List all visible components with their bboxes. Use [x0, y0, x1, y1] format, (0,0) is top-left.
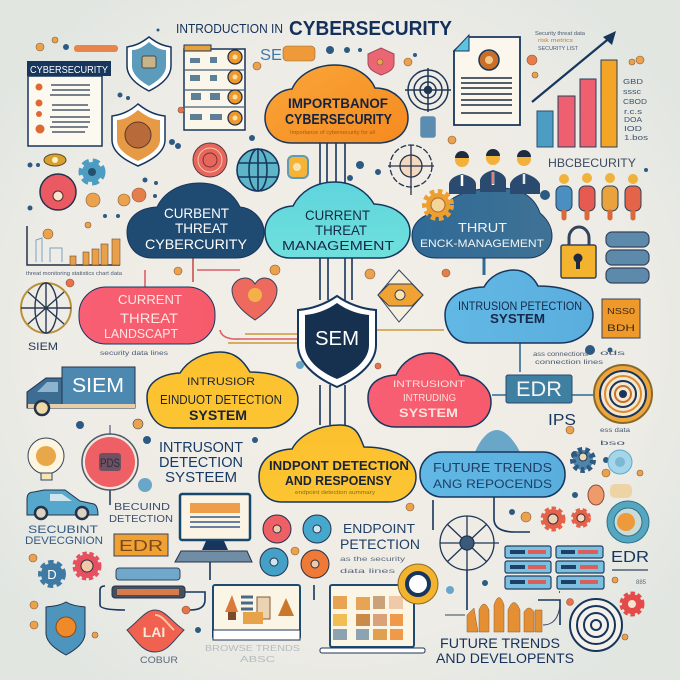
title — [176, 18, 453, 40]
heading: intrusion detection system — [159, 439, 243, 486]
label: becuind detection — [109, 502, 173, 525]
icon: concentric rings orange — [594, 365, 652, 423]
icon: circuit box: BDH — [607, 323, 635, 333]
icon: orange key tile — [288, 156, 308, 178]
icon: red gear — [622, 594, 642, 614]
title: CYBERSECURITY — [289, 18, 453, 40]
icon: SIEM truck — [27, 367, 135, 415]
bar chart: left panel: threat monitoring statistics chart data — [26, 271, 122, 277]
label: future trends and developments: AND DEVELOPENTS — [436, 650, 574, 666]
label: future trends and developments: FUTURE TRENDS — [440, 635, 560, 651]
cloud: importance of cybersecurity: Importance of cybersecurity for all — [290, 130, 375, 136]
decorative underline with notes — [612, 570, 648, 586]
icon: LAI badge — [127, 610, 184, 652]
icon: blue gear — [82, 162, 102, 182]
small text: top right notes: connection lines — [535, 360, 603, 366]
small text: top right notes — [533, 351, 631, 447]
cloud: intrusion detection system: SYSTEM — [189, 407, 247, 423]
pill: current threat landscape: LANDSCAPT — [104, 326, 178, 341]
small text column: CBOD — [623, 99, 647, 106]
label: SE tag: SE — [260, 47, 282, 64]
cloud: current threat cybercurity — [127, 183, 264, 258]
small text column: 1.bos — [624, 135, 649, 142]
icons: three team members — [449, 149, 540, 194]
heading: intrusion detection system: INTRUSONT — [159, 439, 243, 456]
label: browse trends faded — [205, 644, 300, 664]
label: endpoint detection: ENDPOINT — [343, 521, 415, 536]
connector lines — [100, 143, 594, 625]
small text: siem notes: security data lines — [100, 351, 168, 357]
label: EDR: EDR — [611, 549, 649, 566]
icon: network wheel — [440, 516, 499, 570]
icon: blue shield — [127, 37, 171, 91]
chart: orange peaks — [467, 598, 542, 632]
small text column: GBD — [623, 79, 643, 86]
tag: EDR blue — [506, 375, 572, 403]
small text: chart notes — [535, 31, 585, 52]
cloud: threat management: ENCK-MANAGEMENT — [420, 238, 544, 250]
cloud: intrusion detection system: INTRUSIOR — [187, 376, 255, 388]
icon: gold badge — [44, 154, 66, 166]
panel: cybersecurity checklist — [27, 61, 111, 146]
small text: top right notes: ods — [600, 351, 625, 357]
icon: pale blue badge — [608, 450, 632, 474]
heading: intrusion detection system: DETECTION — [159, 454, 243, 471]
label: SIEM small: SIEM — [28, 341, 58, 353]
label: secubint devecgnion: DEVECGNION — [25, 535, 103, 547]
icon: desktop computer — [175, 494, 252, 562]
central SEM shield — [298, 296, 376, 387]
crosshair target: threat — [388, 145, 434, 195]
icon: orange gear — [426, 193, 450, 217]
small text: endpoint notes — [340, 557, 405, 575]
icon: blue car — [27, 490, 98, 519]
icon: gold globe wheel — [21, 283, 71, 333]
icon: gold ring badge — [398, 564, 438, 604]
cloud: importance of cybersecurity: IMPORTBANOF — [288, 95, 388, 111]
small text: top right notes: bso — [600, 441, 627, 447]
cloud: current threat cybercurity: CURBENT — [164, 205, 229, 221]
cloud: threat management — [412, 188, 552, 258]
cloud: intrusion prevention system — [445, 270, 593, 343]
cloud: endpoint detection and response — [259, 425, 416, 502]
cloud: intrusion prevention system coral: SYSTEM — [399, 406, 458, 420]
cloud: intrusion prevention system coral — [368, 353, 491, 427]
label: becuind detection: DETECTION — [109, 514, 173, 525]
icon: database stack — [606, 232, 649, 283]
central SEM shield: SEM — [315, 328, 359, 350]
pill: current threat landscape — [79, 287, 215, 344]
icon: laptop with tools — [213, 585, 300, 640]
label: endpoint detection: PETECTION — [340, 536, 420, 552]
small text: endpoint notes: data lines — [340, 569, 395, 575]
icon: LAI badge: LAI — [143, 624, 165, 640]
chart baseline — [445, 605, 560, 625]
cloud: intrusion prevention system coral: INTRUSIONT — [393, 379, 466, 389]
cloud: current threat management: THREAT — [315, 222, 367, 238]
cloud: current threat cybercurity: THREAT — [175, 220, 228, 236]
label: endpoint detection — [340, 521, 420, 552]
small text column: sssc — [623, 89, 642, 96]
label: future trends and developments — [436, 635, 574, 666]
icon: laptop with grid — [320, 585, 425, 653]
icon: heart — [232, 278, 277, 320]
icon: red gear face — [75, 554, 99, 578]
icon: teal ring — [607, 501, 649, 543]
icon: red circle alarm — [40, 174, 76, 210]
icon: red target IPS: PDS — [100, 456, 120, 470]
icon: light bulb — [28, 438, 64, 480]
document with seal — [454, 35, 520, 125]
cloud: current threat cybercurity: CYBERCURITY — [145, 236, 248, 252]
cloud: future trends and responses: ANG REPOCENDS — [433, 477, 552, 491]
icon: coral badges — [588, 484, 632, 505]
label: cobur: COBUR — [140, 655, 179, 665]
cloud: importance of cybersecurity: CYBERSECURITY — [285, 111, 392, 128]
icons: four standing figures — [556, 173, 641, 218]
bars: blue and dark — [112, 568, 185, 598]
icon: teal globe — [237, 149, 279, 191]
icon: padlock — [561, 227, 596, 278]
cloud: intrusion prevention system coral: INTRUDING — [403, 393, 456, 404]
icon: diamond eye — [378, 270, 423, 322]
cloud: current threat management — [265, 182, 410, 258]
icon: circuit box: NSS0 — [607, 307, 636, 316]
icon: navy D gear — [41, 563, 63, 585]
label: SE tag — [260, 46, 315, 64]
cloud: threat management: THRUT — [458, 220, 507, 235]
panel: cybersecurity checklist: CYBERSECURITY — [30, 65, 108, 76]
icon: SIEM truck: SIEM — [72, 375, 124, 397]
icon: crosshair target — [405, 68, 451, 137]
label: IPS: IPS — [548, 412, 576, 429]
icon: red target IPS — [82, 425, 138, 505]
bar chart: left panel — [26, 226, 122, 277]
cloud: current threat management: MANAGEMENT — [282, 238, 394, 253]
small text: chart notes: SECURITY LIST — [538, 46, 578, 52]
icon: blue face shield — [46, 602, 85, 655]
cloud: importance of cybersecurity — [265, 65, 408, 143]
small text: chart notes: risk metrics — [538, 38, 574, 44]
small text: top right notes: ess data — [600, 428, 631, 434]
small text: chart notes: Security threat data — [535, 31, 585, 37]
icon: steel gear — [573, 450, 593, 470]
label: becuind detection: BECUIND — [114, 502, 170, 513]
small text column: DOA — [624, 117, 642, 124]
small text: top right notes: ass connections — [533, 352, 588, 358]
pill: current threat landscape: THREAT — [120, 310, 178, 326]
heading: intrusion detection system: SYSTEEM — [165, 469, 237, 486]
cloud: intrusion prevention system: INTRUSION PETECTION — [458, 299, 582, 313]
cloud: future trends and responses — [420, 430, 565, 497]
title: INTRODUCTION IN — [176, 21, 283, 36]
label: security: HBCBECURITY — [548, 156, 636, 170]
icon: circuit box — [602, 299, 640, 338]
icon: navy D gear: D — [47, 567, 57, 582]
cloud: endpoint detection and response: INDPONT DETECTION — [269, 458, 409, 473]
chips: six status tags — [505, 546, 604, 589]
label: browse trends faded: BROWSE TRENDS — [205, 644, 300, 653]
icon: shield tag — [368, 48, 394, 75]
decorative underline with notes: 885 — [636, 580, 647, 586]
tag: EDR blue: EDR — [516, 378, 562, 401]
cloud: endpoint detection and response: AND RESPOENSY — [285, 473, 392, 488]
icon: orange shield — [112, 104, 165, 166]
pill: current threat landscape: CURRENT — [118, 292, 182, 307]
cloud: intrusion prevention system: SYSTEM — [490, 311, 545, 326]
panel: status list — [184, 45, 245, 130]
icons: four status circles — [260, 515, 331, 578]
cloud: endpoint detection and response: endpoint detection summary — [295, 490, 376, 496]
small text column: IOD — [624, 126, 642, 133]
icons: twin red gears — [543, 509, 589, 529]
small text column: r.c.s — [624, 109, 643, 116]
cloud: intrusion detection system — [147, 352, 298, 428]
cloud: intrusion detection system: EINDUOT DETECTION — [160, 392, 282, 407]
icon: coral spiral — [193, 143, 227, 177]
tag: EDR orange: EDR — [119, 538, 163, 555]
small text: endpoint notes: as the security — [340, 557, 405, 563]
label: secubint devecgnion: SECUBINT — [28, 524, 98, 536]
cloud: current threat management: CURRENT — [305, 207, 370, 223]
tag: EDR orange — [114, 534, 168, 556]
cloud: future trends and responses: FUTURE TRENDS — [433, 460, 552, 475]
bar chart with trend arrow — [532, 31, 617, 147]
small text column — [623, 79, 649, 142]
label: secubint devecgnion — [25, 524, 103, 547]
label: browse trends faded: ABSC — [240, 655, 275, 664]
icon: concentric rings navy — [570, 599, 622, 651]
